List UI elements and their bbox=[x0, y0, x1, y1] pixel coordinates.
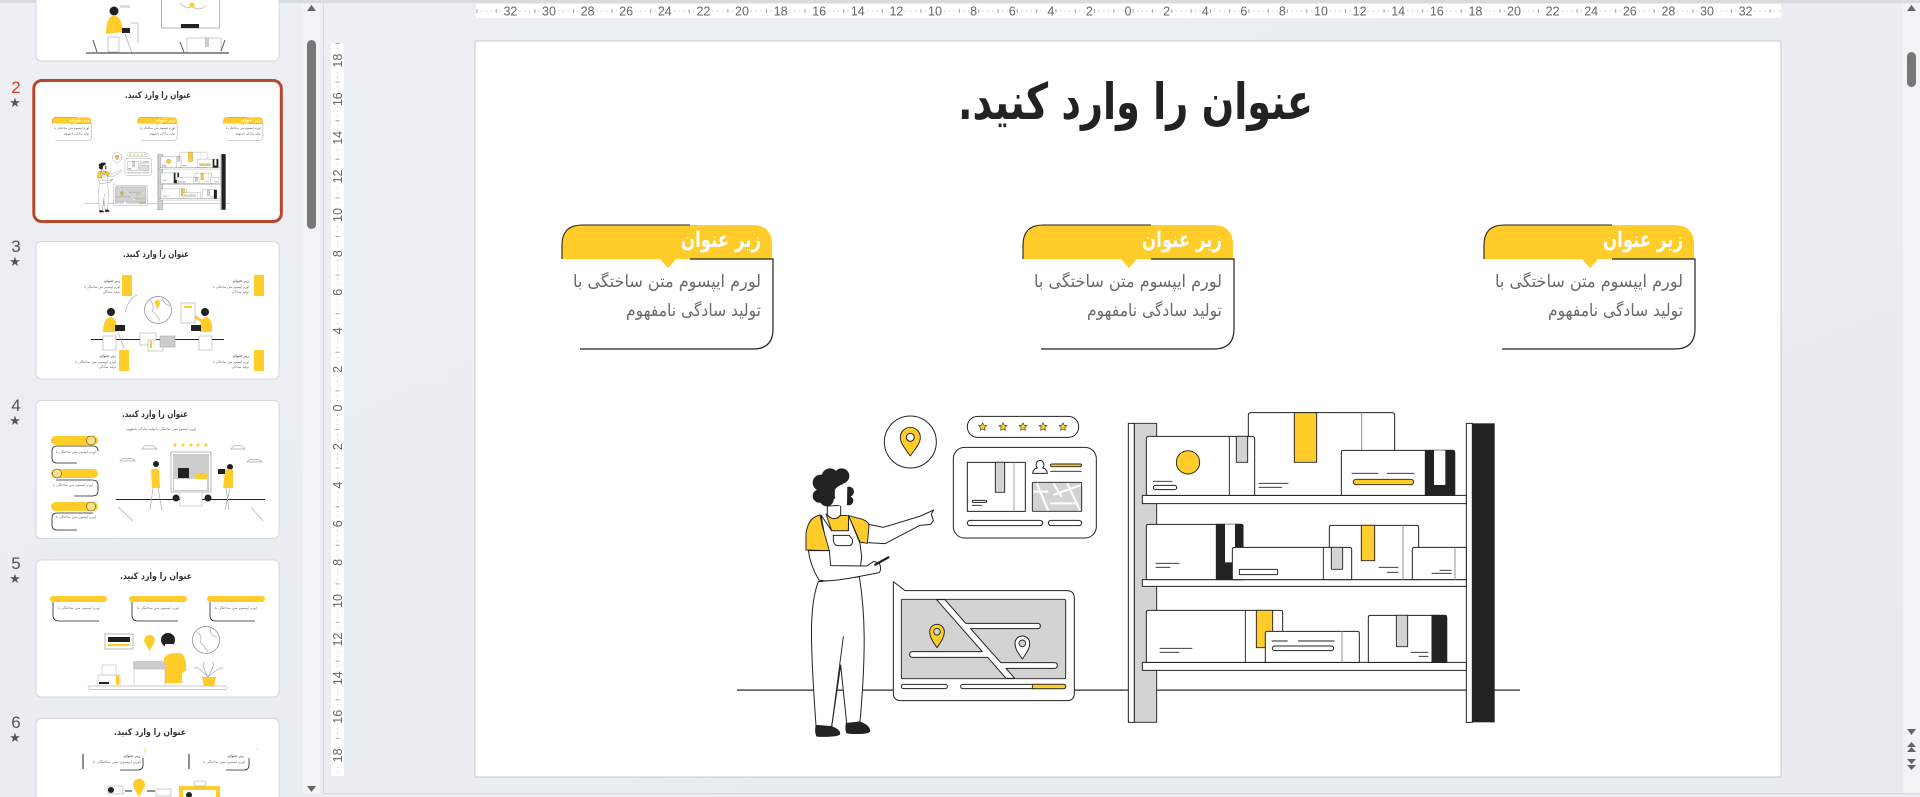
card 1 text: زیر عنوان bbox=[681, 228, 761, 253]
neck bbox=[827, 505, 841, 519]
person bbox=[806, 468, 934, 736]
card 1 text: لورم ایپسوم متن ساختگی با bbox=[573, 271, 761, 292]
thumbnail 6: ٠١ bbox=[253, 746, 259, 753]
delivery info card bbox=[953, 447, 1096, 538]
thumbnail cards: زیر عنوان bbox=[241, 118, 261, 123]
card 1 text bbox=[573, 228, 761, 321]
vertical ruler: 18 bbox=[331, 54, 345, 68]
right post bbox=[1466, 423, 1495, 722]
number and star: slide 6: ★ bbox=[9, 731, 21, 746]
vertical ruler: 14 bbox=[331, 671, 345, 685]
vertical ruler: 10 bbox=[331, 594, 345, 608]
horizontal ruler: 22 bbox=[696, 4, 710, 18]
thumbnail cards: زیر عنوان bbox=[69, 118, 90, 123]
horizontal ruler: 8 bbox=[1279, 4, 1286, 18]
thumbnail cards: تولید سادگی نامفهوم bbox=[64, 131, 89, 136]
horizontal ruler: 26 bbox=[1623, 4, 1637, 18]
number and star: slide 3 bbox=[9, 237, 21, 270]
horizontal ruler: 6 bbox=[1240, 4, 1247, 18]
rating stars pill bbox=[967, 416, 1079, 437]
horizontal ruler: 4 bbox=[1047, 4, 1054, 18]
thumbnail 4 bbox=[36, 400, 279, 538]
horizontal ruler: 4 bbox=[1202, 4, 1209, 18]
thumbnail 3: عنوان را وارد کنید. bbox=[123, 250, 189, 260]
main slide bbox=[475, 41, 1781, 777]
thumbnail 2, selected bbox=[34, 80, 281, 222]
thumbnail 3 bbox=[36, 242, 279, 379]
number and star: slide 6: 6 bbox=[11, 713, 21, 732]
shelf boards bbox=[1142, 495, 1466, 670]
horizontal ruler: 2 bbox=[1086, 4, 1093, 18]
number and star: slide 3: ★ bbox=[9, 255, 21, 270]
horizontal ruler: 16 bbox=[812, 4, 826, 18]
horizontal ruler: 0 bbox=[1125, 4, 1132, 18]
face bbox=[835, 484, 847, 506]
middle shelf boxes bbox=[1146, 524, 1466, 580]
vertical ruler: 6 bbox=[331, 520, 345, 527]
thumbnail 5: لورم ایپسوم متن ساختگی با bbox=[58, 605, 100, 611]
number and star: slide 4: ★ bbox=[9, 414, 21, 429]
number and star: slide 2 bbox=[9, 78, 21, 111]
bottom shelf boxes bbox=[1146, 610, 1447, 662]
card 3 text bbox=[1495, 228, 1683, 321]
card 2 text: زیر عنوان bbox=[1142, 228, 1222, 253]
number and star: slide 5: 5 bbox=[11, 554, 21, 573]
number and star: slide 4: 4 bbox=[11, 396, 21, 415]
thumbnail 6: لورم ایپسوم متن ساختگی با bbox=[203, 759, 245, 765]
left post bbox=[1128, 423, 1157, 722]
thumbnail 3: زیر عنوان bbox=[104, 279, 120, 283]
vertical ruler: 12 bbox=[331, 169, 345, 183]
overalls pocket bbox=[833, 535, 853, 546]
hair bbox=[813, 468, 854, 506]
horizontal ruler: 28 bbox=[1661, 4, 1675, 18]
thumbnail cards: لورم ایپسوم متن ساختگی با bbox=[140, 126, 175, 131]
horizontal ruler: 2 bbox=[1163, 4, 1170, 18]
vertical ruler: 0 bbox=[331, 404, 345, 411]
thumbnail 6: عنوان را وارد کنید. bbox=[114, 728, 186, 738]
horizontal ruler: 32 bbox=[1739, 4, 1753, 18]
horizontal ruler bbox=[476, 4, 1781, 18]
horizontal ruler: 30 bbox=[1700, 4, 1714, 18]
thumbnail cards: لورم ایپسوم متن ساختگی با bbox=[226, 126, 261, 131]
thumbnail 6 bbox=[36, 718, 279, 797]
vertical ruler bbox=[331, 43, 345, 776]
vertical ruler: 4 bbox=[331, 327, 345, 334]
vertical ruler: 16 bbox=[331, 92, 345, 106]
card 3 text: لورم ایپسوم متن ساختگی با bbox=[1495, 271, 1683, 292]
thumbnail 3: لورم ایپسوم متن ساختگی با bbox=[84, 284, 120, 290]
horizontal ruler: 26 bbox=[619, 4, 633, 18]
thumbnail 3: تولید سادگی bbox=[103, 289, 120, 294]
horizontal ruler: 22 bbox=[1546, 4, 1560, 18]
shirt bbox=[826, 514, 849, 531]
thumbnail 3: لورم ایپسوم متن ساختگی با bbox=[213, 359, 249, 365]
number and star: slide 2: ★ bbox=[9, 96, 21, 111]
number and star: slide 3: 3 bbox=[11, 237, 21, 256]
legs bbox=[811, 577, 864, 727]
top shelf boxes bbox=[1146, 413, 1455, 495]
card 1 shape bbox=[562, 225, 773, 349]
card 2 text: لورم ایپسوم متن ساختگی با bbox=[1034, 271, 1222, 292]
slide thumbnail panel bbox=[9, 0, 281, 797]
torso and overalls bbox=[820, 515, 862, 582]
horizontal ruler: 32 bbox=[503, 4, 517, 18]
pointing arm bbox=[867, 510, 934, 544]
phone bbox=[875, 557, 888, 565]
card 3 text: تولید سادگی نامفهوم bbox=[1548, 300, 1683, 321]
thumbnail 6: زیر عنوان bbox=[228, 754, 244, 758]
vertical ruler: 12 bbox=[331, 633, 345, 647]
horizontal ruler: 20 bbox=[735, 4, 749, 18]
vertical ruler: 18 bbox=[331, 748, 345, 762]
thumbnail 3: لورم ایپسوم متن ساختگی با bbox=[75, 359, 116, 365]
shoes bbox=[816, 726, 840, 736]
vertical ruler: 10 bbox=[331, 208, 345, 222]
horizontal ruler: 18 bbox=[1468, 4, 1482, 18]
thumbnail 4: لورم ایپسوم متن ساختگی با bbox=[56, 449, 96, 455]
thumbnail 3: تولید سادگی bbox=[232, 364, 249, 369]
illustration bbox=[737, 413, 1520, 736]
card 3 text: زیر عنوان bbox=[1603, 228, 1683, 253]
card 1 text: تولید سادگی نامفهوم bbox=[626, 300, 761, 321]
vertical ruler: 6 bbox=[331, 289, 345, 296]
number and star: slide 5 bbox=[9, 554, 21, 587]
horizontal ruler: 12 bbox=[889, 4, 903, 18]
thumbnail 3: تولید سادگی bbox=[232, 289, 249, 294]
thumbnail 5: عنوان را وارد کنید. bbox=[120, 572, 192, 582]
horizontal ruler: 6 bbox=[1009, 4, 1016, 18]
vertical ruler: 2 bbox=[331, 443, 345, 450]
vertical ruler: 2 bbox=[331, 366, 345, 373]
horizontal ruler: 24 bbox=[1584, 4, 1598, 18]
thumbnail cards bbox=[52, 117, 263, 212]
thumbnail 6: لورم ایپسوم متن ساختگی با bbox=[93, 759, 141, 765]
horizontal ruler: 14 bbox=[1391, 4, 1405, 18]
vertical ruler: 8 bbox=[331, 250, 345, 257]
thumbnail cards: زیر عنوان bbox=[155, 118, 176, 123]
horizontal ruler: 12 bbox=[1353, 4, 1367, 18]
horizontal ruler: 16 bbox=[1430, 4, 1444, 18]
thumbnail 3: تولید سادگی bbox=[99, 364, 116, 369]
number and star: slide 6 bbox=[9, 713, 21, 746]
horizontal ruler: 20 bbox=[1507, 4, 1521, 18]
card 2 shape bbox=[1023, 225, 1234, 349]
thumbnail cards: لورم ایپسوم متن ساختگی با bbox=[54, 126, 89, 131]
thumbnail 5: لورم ایپسوم متن ساختگی با bbox=[137, 605, 179, 611]
thumbnail cards: تولید سادگی نامفهوم bbox=[236, 131, 261, 136]
thumbnail 4: لورم ایپسوم متن ساختگی با bbox=[56, 514, 96, 520]
thumbnail 6: ٠٢ bbox=[141, 748, 147, 755]
location pin bubble bbox=[884, 416, 936, 468]
horizontal ruler: 24 bbox=[658, 4, 672, 18]
thumbnail 3: زیر عنوان bbox=[233, 279, 249, 283]
number and star: slide 2: 2 bbox=[11, 78, 21, 97]
horizontal ruler: 28 bbox=[581, 4, 595, 18]
thumbnail 3: زیر عنوان bbox=[233, 354, 249, 358]
horizontal ruler: 14 bbox=[851, 4, 865, 18]
map speech bubble bbox=[893, 582, 1074, 701]
thumbnail 5: لورم ایپسوم متن ساختگی با bbox=[215, 605, 257, 611]
holding arm bbox=[808, 551, 881, 581]
card 2 text: تولید سادگی نامفهوم bbox=[1087, 300, 1222, 321]
thumbnail title: عنوان را وارد کنید. bbox=[125, 91, 191, 101]
horizontal ruler: 10 bbox=[1314, 4, 1328, 18]
vertical ruler: 16 bbox=[331, 710, 345, 724]
number and star: slide 5: ★ bbox=[9, 572, 21, 587]
thumbnail 4: لورم ایپسوم متن ساختگی با bbox=[53, 482, 93, 488]
thumbnail 6: زیر عنوان bbox=[124, 754, 140, 758]
thumbnail 4: عنوان را وارد کنید. bbox=[122, 410, 188, 420]
card 2 text bbox=[1034, 228, 1222, 321]
number and star: slide 4 bbox=[9, 396, 21, 429]
horizontal ruler: 30 bbox=[542, 4, 556, 18]
thumbnail 1 bbox=[36, 0, 279, 61]
thumbnail 3: زیر عنوان bbox=[100, 354, 116, 358]
person, pin and screens bbox=[806, 416, 1096, 736]
thumbnail cards: تولید سادگی نامفهوم bbox=[150, 131, 175, 136]
card shapes bbox=[562, 225, 1695, 349]
vertical ruler: 14 bbox=[331, 131, 345, 145]
title: عنوان را وارد کنید. bbox=[958, 73, 1313, 132]
card 3 shape bbox=[1484, 225, 1695, 349]
thumbnail 4: لورم ایپسوم متن ساختگی با تولید سادگی نامفهوم bbox=[126, 426, 196, 432]
left panel scrollbar bbox=[302, 3, 320, 793]
right scrollbar bbox=[1903, 3, 1920, 793]
thumbnail 5 bbox=[36, 560, 279, 697]
horizontal ruler: 10 bbox=[928, 4, 942, 18]
horizontal ruler: 8 bbox=[970, 4, 977, 18]
vertical ruler: 4 bbox=[331, 482, 345, 489]
shelf unit with boxes bbox=[1128, 413, 1495, 722]
vertical ruler: 8 bbox=[331, 559, 345, 566]
horizontal ruler: 18 bbox=[774, 4, 788, 18]
thumbnail 3: لورم ایپسوم متن ساختگی با bbox=[213, 284, 249, 290]
